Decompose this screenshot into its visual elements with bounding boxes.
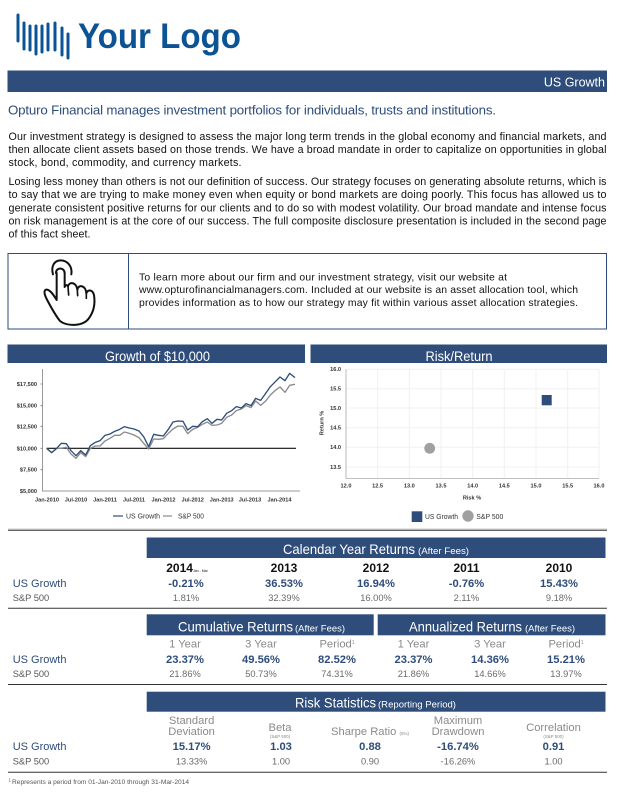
heading: Calendar Year Returns — [283, 542, 415, 557]
year labels: 2011 — [453, 561, 480, 575]
x axis labels: Jul-2011 — [123, 498, 145, 504]
year labels — [166, 561, 573, 575]
scatter chart: 14.0 — [330, 445, 341, 451]
heading: (After Fees) — [418, 546, 469, 556]
text block: definition of success — [8, 176, 607, 240]
row: US Growth: 23.37% — [395, 654, 433, 666]
row: S&P 500 — [13, 593, 572, 603]
row: US Growth: 23.37% — [166, 654, 204, 666]
scatter chart: 14.0 — [467, 484, 478, 490]
row: S&P 500: 32.39% — [268, 593, 300, 603]
row: US Growth: 82.52% — [318, 654, 356, 666]
heading: cumulative — [147, 614, 374, 635]
column labels: 1 — [581, 640, 584, 646]
x axis labels: Jan-2011 — [93, 498, 117, 504]
row: S&P 500: 13.33% — [176, 756, 207, 766]
row: S&P 500: 1.00 — [544, 756, 563, 766]
row: S&P 500: 50.73% — [245, 669, 277, 679]
text block: investment strategy: Our investment strategy is designed to assess the major long term trends in the global economy and financial markets, and — [8, 131, 607, 143]
scatter chart: 15.5 — [562, 484, 573, 490]
heading: Risk Statistics — [295, 696, 376, 711]
row: US Growth: 36.53% — [265, 578, 303, 590]
column labels: 3 Year — [245, 638, 277, 650]
scatter chart: 12.5 — [372, 484, 383, 490]
row: S&P 500: 74.31% — [321, 669, 353, 679]
row: S&P 500: S&P 500 — [13, 593, 49, 603]
heading: annualized: (After Fees) — [525, 624, 575, 634]
row: S&P 500: 16.00% — [360, 593, 392, 603]
scatter chart: 16.0 — [330, 367, 341, 373]
column labels: Beta — [268, 722, 292, 734]
scatter chart: 15.5 — [330, 386, 341, 392]
row: US Growth: 14.36% — [471, 654, 509, 666]
column labels: 1 — [352, 640, 355, 646]
scatter chart — [320, 367, 604, 502]
text block: definition of success: generate consistent positive returns for our clients and to do so with modest volatility. Our broad mandate and intense focus — [8, 202, 606, 214]
heading: annualized — [378, 614, 606, 635]
text block: investment strategy: stock, bond, commodity, and currency markets. — [8, 157, 242, 169]
panel: growth of $10,000 — [8, 344, 305, 520]
year labels: 2010 — [546, 561, 573, 575]
panel: website callout — [8, 254, 606, 329]
row: S&P 500: S&P 500 — [13, 669, 49, 679]
callout text: To learn more about our firm and our investment strategy, visit our website at — [139, 272, 507, 284]
scatter chart: Risk % — [463, 496, 481, 502]
y axis labels: $5,000 — [20, 489, 37, 495]
scatter chart: 15.0 — [330, 406, 341, 412]
callout text — [138, 272, 578, 309]
column labels: Maximum — [434, 715, 482, 727]
callout text: www.opturofinancialmanagers.com. Included at our website is an asset allocation tool, which — [138, 285, 578, 296]
scatter chart: 16.0 — [594, 484, 604, 490]
column labels: 3 Year — [474, 638, 506, 650]
x axis labels: Jan-2013 — [210, 498, 234, 504]
icon: logo bars — [18, 15, 68, 58]
footnote: 1 — [8, 778, 12, 782]
x axis labels — [35, 498, 292, 504]
heading — [147, 692, 605, 712]
column labels: 1 Year — [169, 638, 201, 650]
row: US Growth: US Growth — [13, 741, 66, 753]
line chart — [17, 369, 300, 504]
column labels: (S&P 500) — [270, 734, 291, 739]
legend: US Growth — [425, 512, 458, 521]
row: US Growth: 15.21% — [547, 654, 585, 666]
row: S&P 500: 2.11% — [454, 593, 479, 603]
row: US Growth: 15.17% — [173, 741, 211, 753]
legend: S&P 500 — [476, 512, 503, 521]
logo text: Your Logo — [78, 17, 241, 56]
icon: pointing hand — [45, 260, 94, 325]
panel: calendar year returns — [13, 538, 605, 603]
heading — [310, 344, 607, 364]
y axis labels: $17,500 — [17, 382, 37, 388]
row: S&P 500: 1.00 — [272, 756, 290, 766]
row: US Growth: 1.03 — [270, 741, 292, 753]
column labels: Period — [548, 638, 581, 650]
x axis labels: Jul-2013 — [239, 498, 261, 504]
column labels: Deviation — [168, 726, 215, 738]
column labels: 1 Year — [398, 638, 430, 650]
scatter chart: Return % — [320, 411, 326, 435]
data point: US Growth — [542, 395, 552, 405]
column labels: Correlation — [526, 722, 581, 734]
heading: (Reporting Period) — [378, 700, 456, 710]
callout text: provides information as to how our strategy may fit within various asset allocation strategies. — [139, 298, 578, 309]
year labels: 2014Jan - Mar — [166, 561, 209, 575]
heading — [8, 344, 305, 364]
row: US Growth: 0.88 — [359, 741, 381, 753]
heading: annualized: Annualized Returns — [409, 620, 522, 634]
y axis labels: $12,500 — [17, 424, 37, 430]
row: US Growth: -0.21% — [168, 578, 204, 590]
legend: US Growth — [126, 512, 160, 520]
scatter chart: 14.5 — [499, 484, 510, 490]
row: US Growth — [13, 654, 585, 666]
column labels: (S&P 500) — [543, 734, 564, 739]
text block: investment strategy: then allocate client assets based on those trends. We have a broad mandate in order to capitalize on opportunities in global — [8, 144, 606, 156]
panel: risk statistics — [13, 692, 605, 766]
row: S&P 500: 21.86% — [169, 669, 201, 679]
text block: investment strategy — [8, 131, 607, 169]
scatter chart: 15.0 — [531, 484, 541, 490]
column labels: Standard — [169, 715, 214, 727]
footnote: Represents a period from 01-Jan-2010 through 31-Mar-2014 — [12, 779, 189, 786]
scatter chart: 12.0 — [341, 484, 351, 490]
scatter chart: 13.0 — [404, 484, 415, 490]
x axis labels: Jan-2012 — [152, 498, 175, 504]
row: US Growth: 49.56% — [242, 654, 280, 666]
column labels: Drawdown — [432, 726, 484, 738]
panel: cumulative and annualized returns — [13, 614, 605, 679]
data point: S&P 500 — [424, 443, 435, 454]
text block: definition of success: on risk management is at the core of our success. The full composite disclosure presentation is included in the second page — [8, 216, 607, 228]
row: S&P 500 — [13, 756, 563, 766]
legend — [113, 512, 204, 520]
column labels: Sharpe Ratio (5%) — [331, 726, 409, 738]
row: US Growth: US Growth — [13, 654, 66, 666]
x axis labels: Jul-2012 — [182, 498, 204, 504]
row: S&P 500: 21.86% — [398, 669, 429, 679]
heading: cumulative: (After Fees) — [295, 624, 345, 634]
column labels — [169, 638, 584, 650]
heading: Risk/Return — [426, 349, 492, 364]
panel: risk/return — [310, 344, 607, 522]
y axis labels — [17, 382, 37, 495]
row: US Growth: 0.91 — [543, 741, 564, 753]
x axis labels: Jan-2014 — [268, 498, 292, 504]
column labels: Period — [319, 638, 352, 650]
text block: definition of success: of this fact sheet. — [8, 228, 90, 240]
legend: S&P 500 — [178, 512, 204, 520]
scatter chart: 13.5 — [330, 465, 341, 471]
year labels: 2013 — [271, 561, 298, 575]
year labels: 2012 — [363, 561, 390, 575]
row: US Growth: -16.74% — [437, 741, 479, 753]
x axis labels: Jul-2010 — [65, 498, 87, 504]
row: US Growth: US Growth — [13, 578, 66, 590]
text block: definition of success: Losing less money than others is not our definition of success. Our strategy focuses on generating absolute returns, which is — [8, 176, 606, 188]
x axis labels: Jan-2010 — [35, 498, 59, 504]
row: S&P 500: 14.66% — [474, 669, 506, 679]
column labels — [168, 715, 581, 739]
row: S&P 500: 13.97% — [550, 669, 582, 679]
row: S&P 500 — [13, 669, 582, 679]
title bar — [8, 70, 607, 92]
title bar: US Growth — [544, 76, 605, 90]
row: S&P 500: S&P 500 — [13, 756, 49, 766]
row: S&P 500: 9.18% — [546, 593, 572, 603]
legend — [412, 510, 503, 522]
scatter chart: 13.5 — [436, 484, 446, 490]
scatter chart: 14.5 — [330, 426, 341, 432]
row: US Growth: -0.76% — [449, 578, 484, 590]
row: US Growth — [13, 741, 564, 753]
heading: Growth of $10,000 — [105, 349, 210, 364]
tagline: Opturo Financial manages investment portfolios for individuals, trusts and institutions. — [8, 102, 496, 118]
row: S&P 500: 0.90 — [361, 756, 379, 766]
y axis labels: $7,500 — [20, 468, 37, 474]
y axis labels: $15,000 — [17, 404, 37, 410]
row: US Growth — [13, 578, 578, 590]
row: US Growth: 16.94% — [357, 578, 395, 590]
row: US Growth: 15.43% — [540, 578, 578, 590]
logo — [18, 15, 241, 58]
row: S&P 500: -16.26% — [441, 756, 475, 766]
text block: definition of success: to say that we are trying to make money even when equity or bond markets are doing poorly. This focus has allowed us to — [8, 189, 607, 201]
heading: cumulative: Cumulative Returns — [178, 620, 293, 634]
heading — [147, 538, 605, 558]
y axis labels: $10,000 — [17, 446, 37, 452]
row: S&P 500: 1.81% — [173, 593, 199, 603]
